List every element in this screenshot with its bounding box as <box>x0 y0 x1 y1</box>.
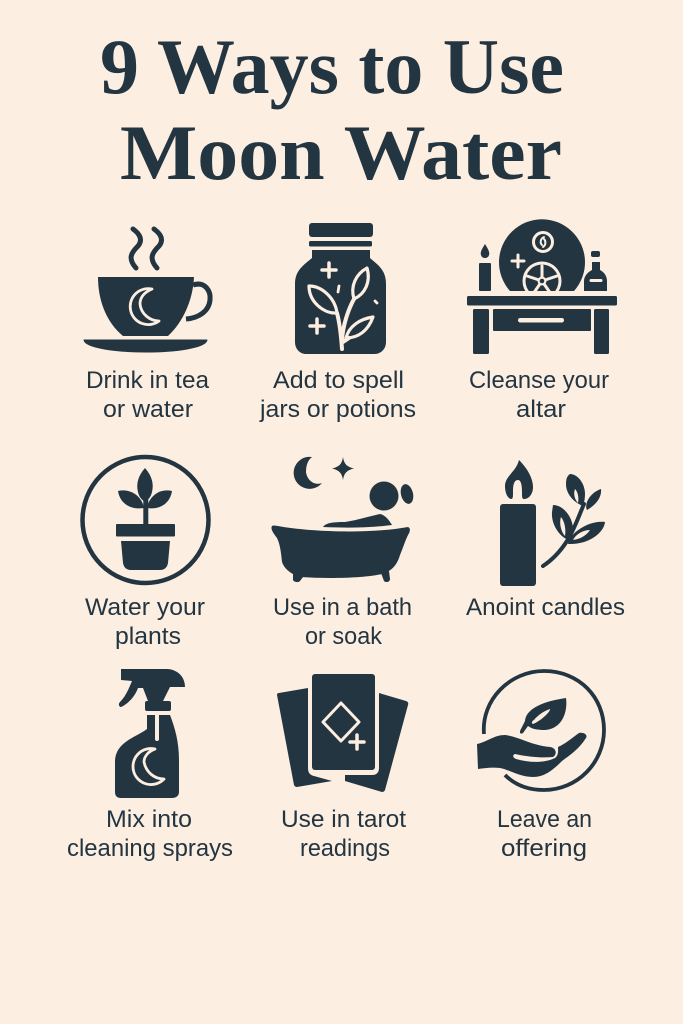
label <box>85 594 205 650</box>
panel: use in tarot readings <box>277 674 408 862</box>
label: Drink in tea <box>86 367 209 394</box>
icon: hand holding leaf in circle <box>477 671 604 790</box>
label: Anoint candles <box>466 594 625 621</box>
label: Mix into <box>106 806 192 833</box>
label: Use in a bath <box>273 594 412 621</box>
icon: candle and herb sprig <box>500 460 605 586</box>
label: altar <box>516 396 566 423</box>
icon: spell jar with plant <box>295 223 386 354</box>
label: Use in tarot <box>281 806 406 833</box>
label <box>67 806 233 862</box>
label: cleaning sprays <box>67 835 233 862</box>
icon: potted plant in circle <box>82 457 208 583</box>
title <box>100 23 564 196</box>
panel: anoint candles <box>466 460 625 621</box>
label: plants <box>115 623 181 650</box>
icon: spray bottle with moon <box>115 669 185 798</box>
label <box>259 367 416 423</box>
icon: teacup with moon <box>84 229 210 352</box>
panel: leave an offering <box>477 671 604 862</box>
label: Cleanse your <box>469 367 609 394</box>
title: Moon Water <box>120 109 562 196</box>
label: readings <box>300 835 390 862</box>
label: or soak <box>305 623 383 650</box>
label: offering <box>501 835 587 862</box>
title: 9 Ways to Use <box>100 23 564 110</box>
panel: water your plants <box>82 457 208 650</box>
label <box>281 806 406 862</box>
label: Add to spell <box>273 367 404 394</box>
icon: three tarot cards <box>277 674 408 792</box>
panel: cleanse your altar <box>467 219 617 423</box>
panel: add to spell jars or potions <box>259 223 416 423</box>
label: Leave an <box>497 806 592 833</box>
panel: drink in tea or water <box>84 229 210 423</box>
label: jars or potions <box>259 396 416 423</box>
label <box>86 367 209 423</box>
label: or water <box>103 396 193 423</box>
panel: mix into cleaning sprays <box>67 669 233 862</box>
label <box>469 367 609 423</box>
panel: use in a bath or soak <box>271 457 415 650</box>
label <box>273 594 412 650</box>
icon: bathtub with person, moon and star <box>271 457 415 582</box>
icon: altar table with mirror, candle and bottle <box>467 219 617 354</box>
label: Water your <box>85 594 205 621</box>
label <box>497 806 592 862</box>
